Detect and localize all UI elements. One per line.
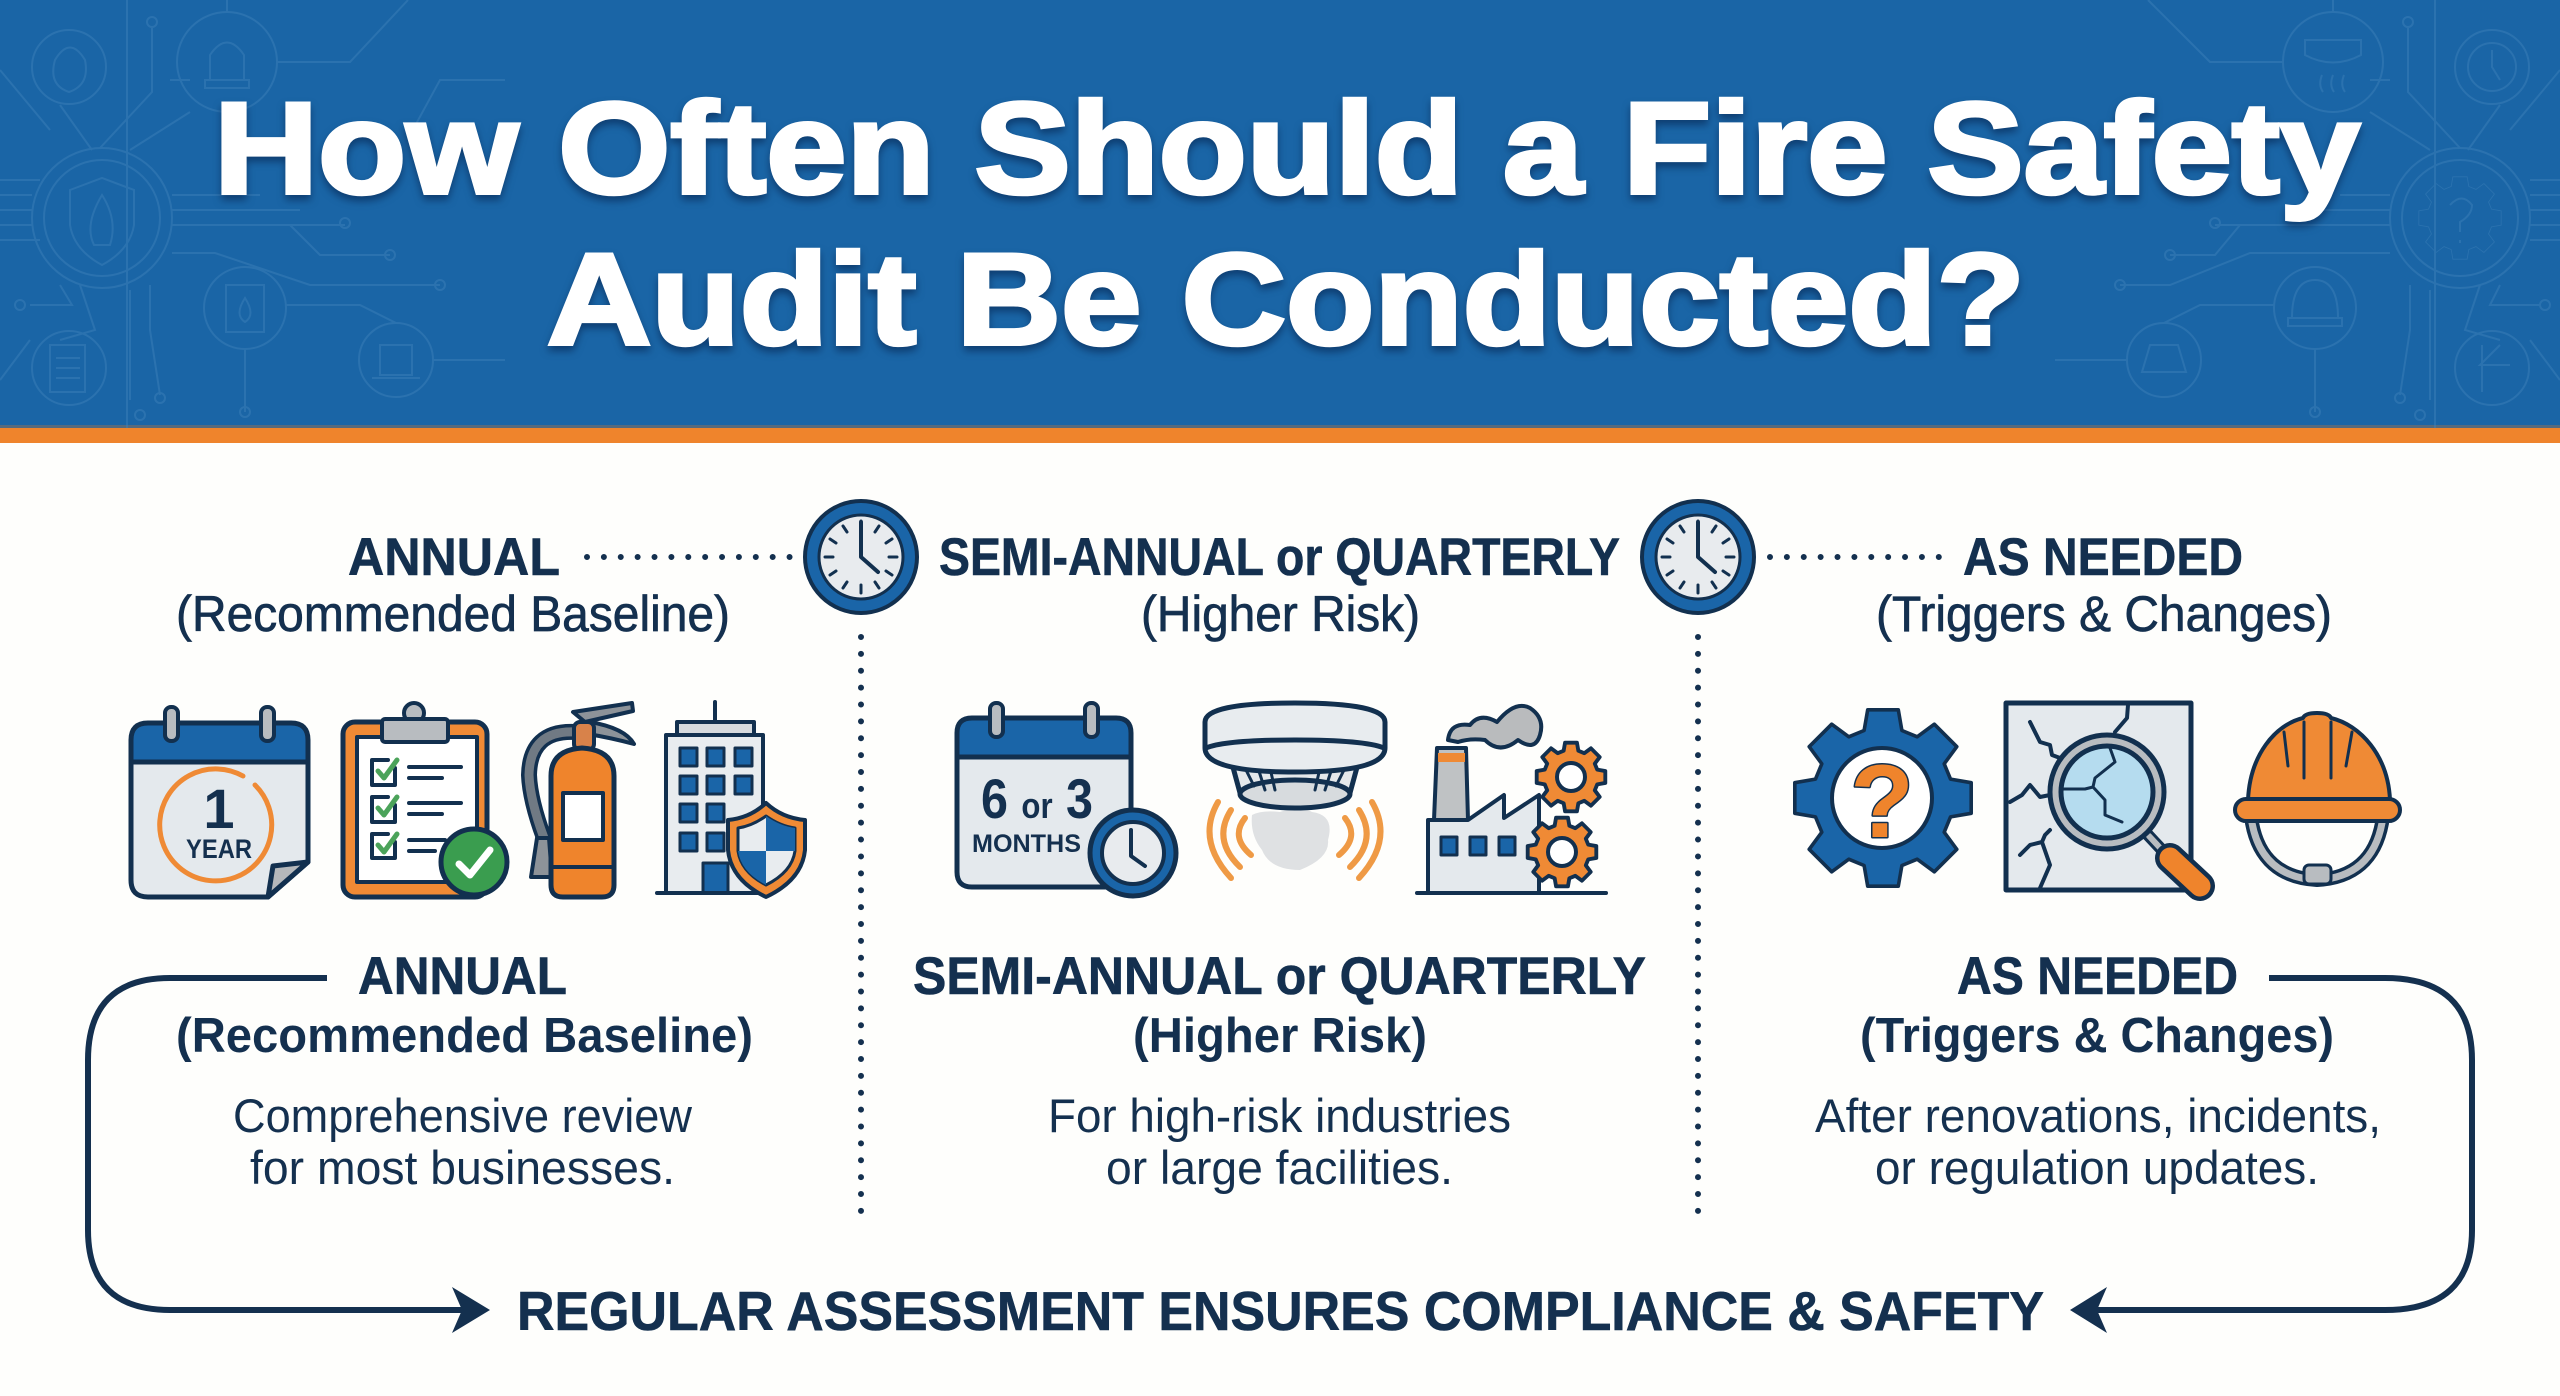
panel: as needed text — [1815, 947, 2381, 1194]
header circuit pattern right — [2055, 0, 2560, 428]
top heading: semi-annual: (Higher Risk) — [1141, 586, 1420, 642]
panel: semi-annual text: SEMI-ANNUAL or QUARTERLY — [913, 947, 1646, 1006]
orange divider bar — [0, 428, 2560, 443]
icon: calendar 1 year: 1 — [203, 777, 235, 840]
panel: semi-annual text: or large facilities. — [1106, 1141, 1453, 1194]
icon: hard hat — [2235, 713, 2400, 884]
title — [214, 75, 2360, 372]
top heading: as needed: AS NEEDED — [1963, 528, 2243, 587]
icon: smoke detector — [1205, 703, 1385, 878]
title: How Often Should a Fire Safety — [214, 75, 2360, 221]
panel: as needed text: After renovations, incidents, — [1815, 1089, 2381, 1142]
top heading: semi-annual — [939, 528, 1620, 642]
top heading: semi-annual: SEMI-ANNUAL or QUARTERLY — [939, 528, 1620, 587]
icon: calendar 1 year: YEAR — [186, 834, 252, 864]
icon: clipboard checklist — [343, 703, 507, 897]
top heading: annual — [176, 528, 730, 642]
title: Audit Be Conducted? — [547, 226, 2025, 372]
panel: annual text: Comprehensive review — [233, 1089, 693, 1142]
top heading: annual: (Recommended Baseline) — [176, 586, 730, 642]
icon: gear with question mark — [1795, 710, 1971, 886]
icon: building with shield — [657, 702, 805, 897]
panel: semi-annual text — [913, 947, 1646, 1194]
panel: semi-annual text: For high-risk industries — [1048, 1089, 1511, 1142]
clock left — [805, 501, 917, 613]
icon: calendar 6 or 3 months: MONTHS — [972, 830, 1081, 858]
icon: fire extinguisher — [529, 703, 634, 897]
top heading: as needed — [1876, 528, 2332, 642]
icon: calendar 1 year — [131, 707, 308, 897]
panel: annual text: for most businesses. — [250, 1141, 675, 1194]
icon: gear with question mark: ? — [1850, 744, 1914, 860]
panel: annual text: (Recommended Baseline) — [176, 1009, 753, 1063]
icon: calendar 6 or 3 months — [957, 703, 1176, 896]
panel: annual text — [176, 947, 753, 1194]
top heading: as needed: (Triggers & Changes) — [1876, 586, 2332, 642]
arrow: left loop — [88, 978, 490, 1333]
icon: cracked wall with magnifier — [2006, 703, 2200, 890]
dotted connector lines — [587, 557, 1943, 1213]
header circuit pattern left — [0, 0, 505, 428]
panel: as needed text: or regulation updates. — [1875, 1141, 2319, 1194]
footer statement: REGULAR ASSESSMENT ENSURES COMPLIANCE & SAFETY — [517, 1280, 2044, 1342]
panel: annual text: ANNUAL — [358, 947, 567, 1006]
panel: semi-annual text: (Higher Risk) — [1133, 1009, 1427, 1063]
header banner — [0, 0, 2560, 428]
top heading: annual: ANNUAL — [348, 528, 560, 587]
panel: as needed text: (Triggers & Changes) — [1860, 1009, 2334, 1063]
clock right — [1642, 501, 1754, 613]
icon: factory with gears — [1417, 706, 1606, 893]
arrow: right loop — [2070, 978, 2472, 1333]
panel: as needed text: AS NEEDED — [1957, 947, 2238, 1006]
icon: calendar 6 or 3 months: 6 or 3 — [981, 767, 1093, 830]
